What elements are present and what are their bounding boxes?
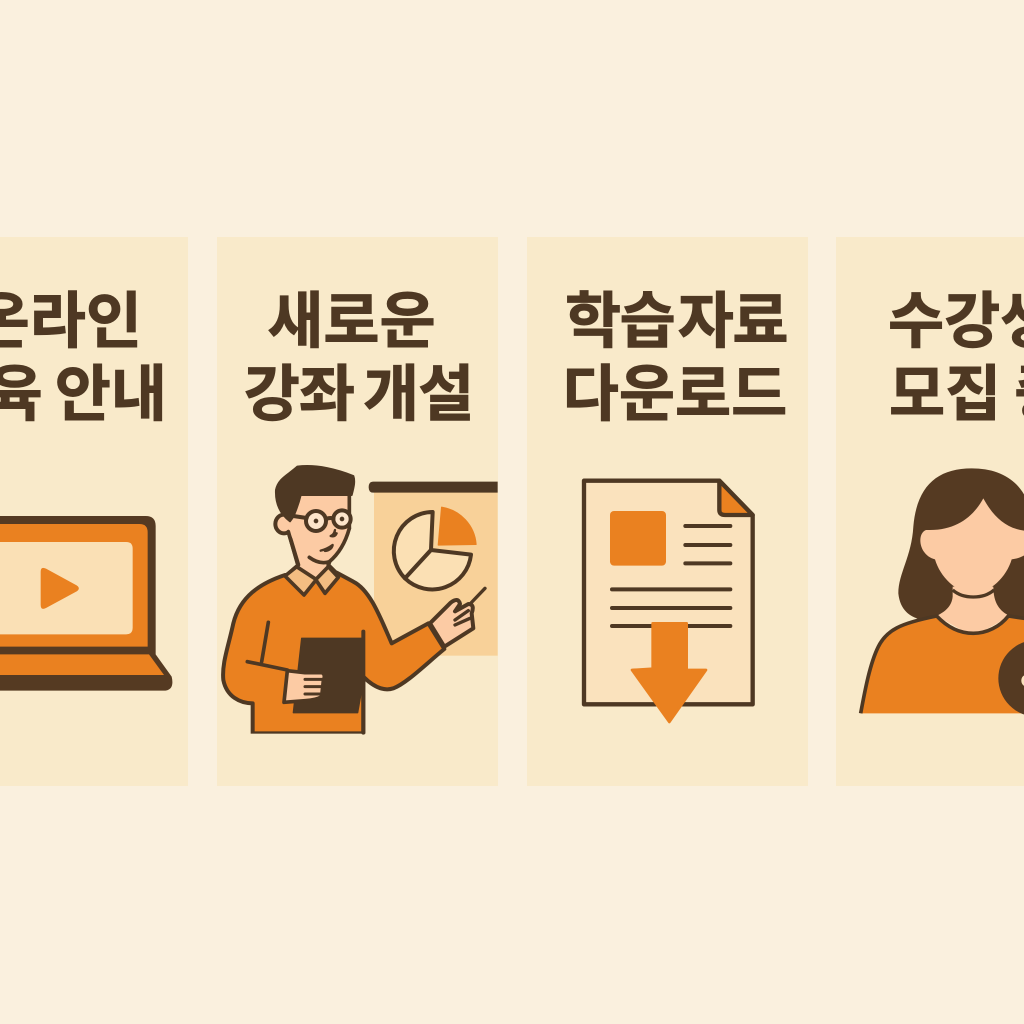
sleeve creases: [247, 622, 287, 670]
page fold: [719, 481, 753, 515]
neck: [937, 587, 1010, 637]
glasses: [293, 510, 351, 531]
sweater bottom mask: [250, 734, 367, 738]
heading: recruiting students: [888, 287, 1024, 428]
heading: study material download: 다운로드: [563, 360, 787, 428]
heading: study material download: [563, 287, 787, 428]
heading: online education guide: [0, 287, 167, 428]
hair: [276, 466, 354, 521]
heading: study material download: 학습 자료: [565, 287, 787, 355]
panel: student recruitment: [836, 237, 1024, 786]
hair: [898, 468, 1024, 619]
heading: new course opening: 새로운: [267, 287, 436, 355]
illustration: presenter with chart: [223, 466, 498, 738]
nose and mouth: [321, 530, 337, 551]
panel: new course opening: [217, 237, 498, 786]
icon: document with download arrow: [584, 481, 753, 722]
presentation board: [369, 482, 498, 656]
ear: [275, 515, 293, 533]
presenter pointer: [470, 588, 485, 604]
image block: [610, 511, 666, 566]
panel: study material download: [527, 237, 808, 786]
face: [288, 493, 349, 564]
text lines: [612, 526, 730, 626]
pointing hand: [430, 600, 473, 647]
face: [920, 498, 1024, 593]
shirt: [861, 616, 1024, 713]
download arrow: [632, 623, 706, 722]
sweater: [223, 573, 444, 733]
icon: laptop with play button: [0, 516, 172, 691]
collar: [285, 567, 338, 595]
neck: [285, 532, 340, 593]
holding hand: [284, 671, 324, 702]
pie chart: [394, 507, 476, 589]
panel: online education: [0, 237, 188, 786]
heading: new course opening: 강좌 개설: [244, 360, 473, 428]
heading: new course opening: [244, 287, 473, 428]
badge circle: [998, 640, 1024, 717]
illustration: student portrait: [861, 468, 1024, 717]
tablet: [293, 638, 364, 713]
